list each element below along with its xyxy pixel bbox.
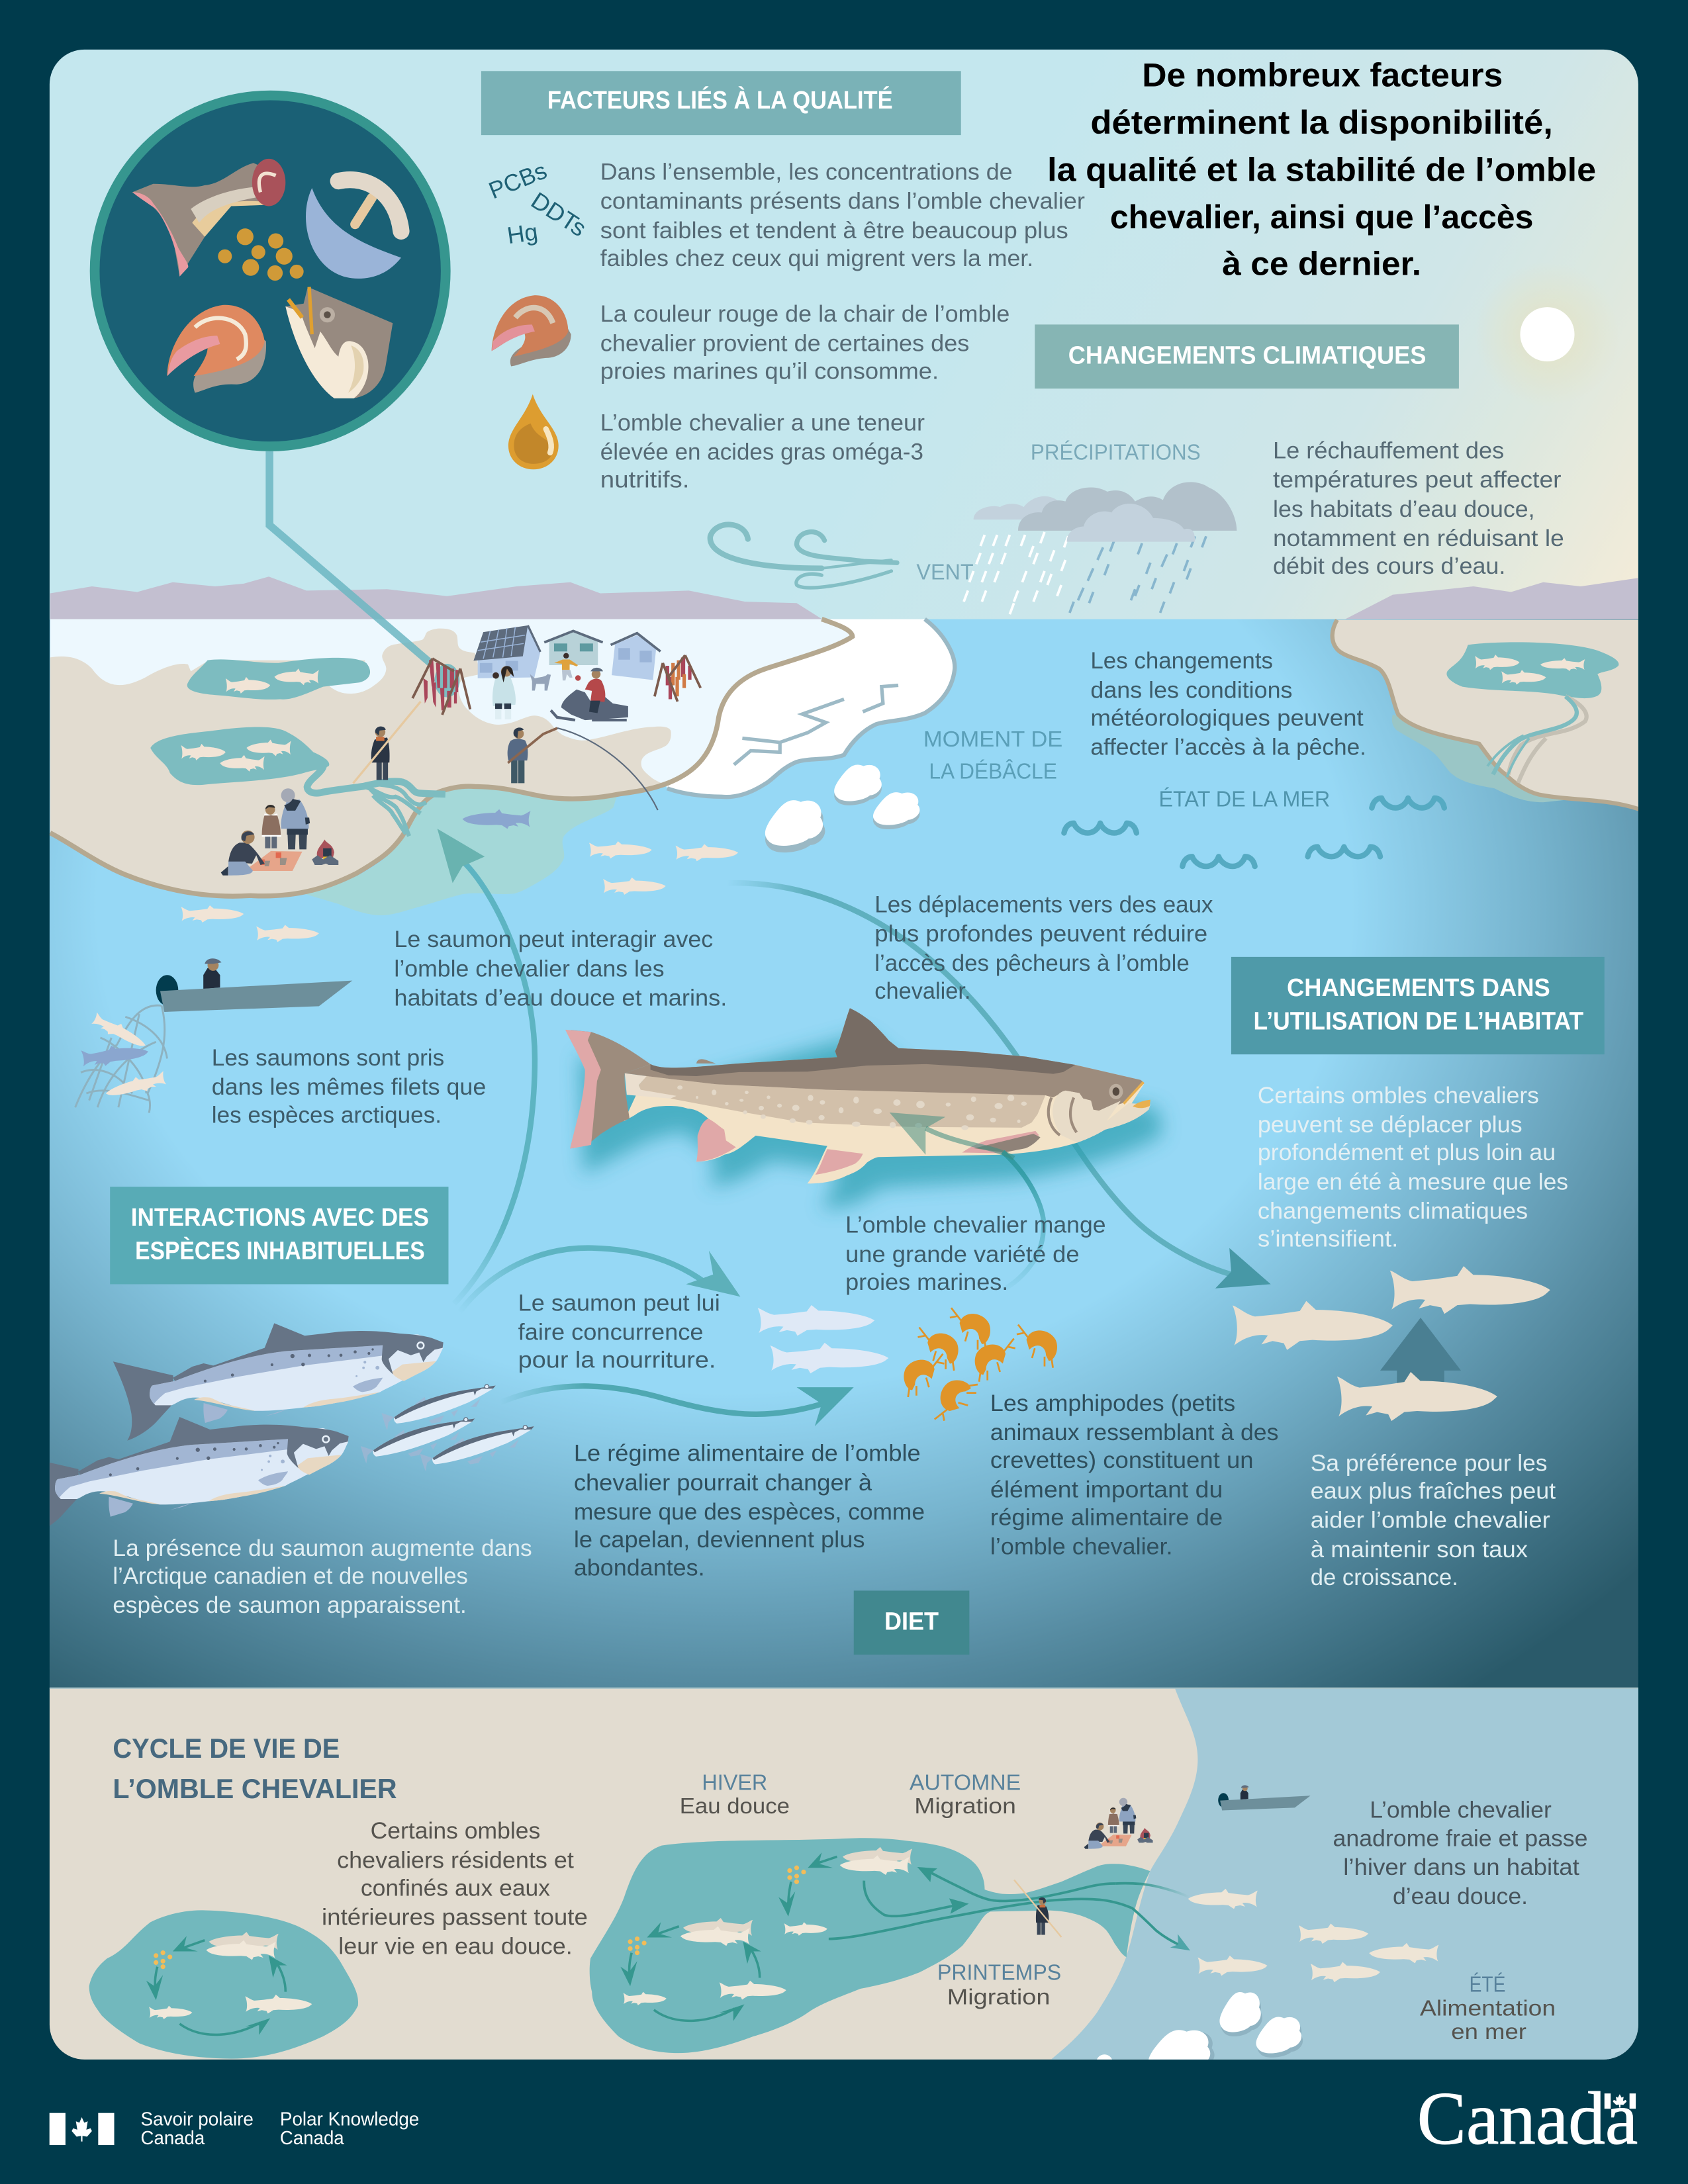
small boat [1218, 1785, 1311, 1810]
silhouette [624, 1008, 1150, 1183]
sea fish and boat [75, 841, 738, 1113]
text: weather access: affecter l’accès à la pêche. [1090, 735, 1366, 760]
text: deeper in summer: peuvent se déplacer plus [1258, 1112, 1523, 1138]
arrow: char to deeper water [727, 883, 1271, 1289]
text: deeper in summer: changements climatiques [1258, 1199, 1528, 1224]
title: la qualité et la stabilité de l’omble [1047, 151, 1596, 189]
heading: cycle de vie: L’OMBLE CHEVALIER [113, 1773, 397, 1804]
arrow: capelin diet [500, 1386, 854, 1426]
text: cooler water [1311, 1450, 1556, 1590]
english wordmark: Polar Knowledge [280, 2109, 419, 2130]
text: warming [1273, 437, 1564, 579]
text: deeper water access: chevalier. [874, 978, 970, 1004]
text: contaminants: Dans l’ensemble, les concentrations de [600, 159, 1013, 185]
quality circle [95, 95, 445, 447]
cream fish [1233, 1266, 1550, 1421]
large arctic char [565, 1008, 1162, 1208]
text: red flesh [600, 301, 1009, 384]
migration arrows [829, 1873, 1189, 1944]
canada wordmark: Canada [1417, 2077, 1638, 2160]
text: weather access: dans les conditions [1090, 677, 1292, 703]
cool water preference diagram [1233, 1266, 1550, 1421]
text: deeper water access [874, 892, 1213, 1004]
text: warming: débit des cours d’eau. [1273, 553, 1505, 579]
icon: rain clouds [964, 482, 1237, 614]
labels: printemps: PRINTEMPS [937, 1961, 1061, 1985]
heading: facteurs liés à la qualité: FACTEURS LIÉS À LA QUALITÉ [547, 85, 893, 114]
child with ball [554, 653, 581, 681]
text: amphipods: régime alimentaire de [990, 1505, 1223, 1531]
text: red flesh: chevalier provient de certaines des [600, 330, 969, 356]
text: red flesh: La couleur rouge de la chair de l’omble [600, 301, 1009, 327]
canadian flag [50, 2113, 115, 2145]
text: cooler water: eaux plus fraîches peut [1311, 1479, 1556, 1504]
juvenile fish [245, 1995, 312, 2013]
text: deeper in summer: Certains ombles chevaliers [1258, 1083, 1539, 1109]
drying rack right [655, 655, 700, 702]
capelin group [361, 1385, 534, 1471]
text: warming: températures peut affecter [1273, 467, 1562, 493]
text: omega 3: nutritifs. [600, 467, 689, 493]
text: deeper in summer: large en été à mesure que les [1258, 1169, 1568, 1195]
sky section [49, 49, 1639, 620]
right land [1333, 620, 1644, 811]
text: salmon interaction [394, 927, 727, 1011]
cream tail base [625, 1073, 677, 1099]
snowmobile rider [551, 668, 628, 720]
cycle arrows [155, 1940, 285, 2034]
text: salmon presence [113, 1535, 532, 1618]
text: anadromous char: d’eau douce. [1393, 1884, 1528, 1909]
icon: red flesh [492, 295, 571, 367]
cloud front [1067, 504, 1195, 542]
resident lake cycle [89, 1910, 358, 2059]
shadow [579, 1034, 1162, 1208]
heading: cycle de vie: CYCLE DE VIE DE [113, 1733, 340, 1764]
ice cracks [734, 685, 898, 764]
labels: été [1420, 1973, 1556, 2044]
text: anadromous char [1333, 1797, 1588, 1909]
leader line from circle to village [269, 451, 430, 663]
title: déterminent la disponibilité, [1090, 103, 1553, 141]
text: nets: les espèces arctiques. [212, 1102, 442, 1128]
gill slits [1049, 1097, 1076, 1135]
title: chevalier, ainsi que l’accès [1110, 198, 1533, 236]
dorsal stripe and fin [651, 1008, 1075, 1076]
cycle group [146, 1932, 312, 2035]
rain [964, 532, 1206, 614]
text: resident char: confinés aux eaux [361, 1875, 551, 1901]
text: deeper water access: Les déplacements vers des eaux [874, 892, 1213, 918]
dog [530, 674, 551, 690]
speckled flank [639, 1076, 1045, 1128]
icon: fish steak [167, 305, 266, 392]
icon: fish tail cut [132, 159, 285, 277]
text: varied diet: proies marines. [845, 1269, 1008, 1295]
text: omega 3 [600, 410, 925, 493]
mouth [1123, 1082, 1143, 1104]
icon: roe eggs [218, 228, 304, 281]
floating ice [765, 764, 919, 852]
heading: interactions avec des espèces inhabituelles [110, 1187, 448, 1284]
text: warming: Le réchauffement des [1273, 437, 1504, 463]
text: contaminants [600, 159, 1085, 271]
heading: changements dans l'utilisation de l'habitat: CHANGEMENTS DANS [1287, 974, 1550, 1002]
coastline [50, 619, 853, 896]
text: resident char [322, 1818, 588, 1960]
ocean feeding fish [1188, 1889, 1438, 1982]
icon: ulu knife [306, 180, 401, 279]
migratory lake and channel [590, 1838, 1150, 2053]
text: amphipods: crevettes) constituent un [990, 1447, 1254, 1473]
text: diet change: mesure que des espèces, comme [574, 1499, 925, 1525]
text: resident char: intérieures passent toute [322, 1905, 588, 1931]
text: salmon presence: l’Arctique canadien et de nouvelles [113, 1563, 468, 1589]
text: amphipods: animaux ressemblant à des [990, 1420, 1278, 1445]
back [625, 1048, 1145, 1111]
icon: sun [1520, 307, 1575, 361]
text: deeper in summer: s’intensifient. [1258, 1226, 1398, 1252]
sea ice edge [667, 619, 955, 797]
icon: oil drop [508, 394, 559, 469]
sea ice [655, 619, 955, 797]
icon: wind [710, 525, 897, 588]
text: resident char: leur vie en eau douce. [338, 1934, 573, 1960]
text: varied diet: L’omble chevalier mange [845, 1212, 1106, 1238]
arctic char swimming [181, 841, 738, 942]
text: competition [518, 1290, 720, 1373]
small family [1084, 1798, 1153, 1849]
label: état de la mer: ÉTAT DE LA MER [1158, 788, 1330, 812]
text: cooler water: à maintenir son taux [1311, 1537, 1528, 1563]
spots [677, 1085, 1027, 1130]
text: varied diet: une grande variété de [845, 1242, 1080, 1267]
icon: contaminants: PCBs [485, 157, 551, 204]
lake one [187, 658, 370, 700]
house with solar panels [473, 625, 540, 678]
fresh ice [50, 619, 853, 836]
text: amphipods: élément important du [990, 1477, 1223, 1502]
text: omega 3: L’omble chevalier a une teneur [600, 410, 925, 435]
lake two and river [150, 727, 445, 836]
labels: printemps: Migration [947, 1985, 1050, 2010]
french wordmark [140, 2109, 254, 2149]
heading: cycle de vie [113, 1733, 397, 1804]
text: deeper in summer [1258, 1083, 1568, 1252]
fish in net [81, 1011, 167, 1101]
label: précipitations: PRÉCIPITATIONS [1031, 441, 1201, 465]
fisher with rod [508, 727, 658, 810]
text: deeper water access: l’accès des pêcheurs à l’omble [874, 950, 1190, 976]
heading: diet [854, 1590, 969, 1655]
text: weather access: Les changements [1090, 648, 1273, 674]
pond behind drying rack [434, 664, 459, 698]
text: deeper water access: plus profondes peuvent réduire [874, 921, 1207, 947]
label: moment de la débâcle [923, 727, 1062, 784]
northern shore map [50, 451, 955, 915]
lower life cycle background [49, 1688, 1639, 2062]
house three [611, 633, 661, 680]
eye [1109, 1084, 1123, 1099]
net [75, 1005, 167, 1113]
english wordmark: Canada [280, 2128, 344, 2149]
head cheek [1053, 1091, 1150, 1143]
heading: interactions avec des espèces inhabituelles: INTERACTIONS AVEC DES [131, 1204, 429, 1232]
cloud left [974, 496, 1072, 520]
text: diet change: abondantes. [574, 1555, 705, 1580]
heading: changements climatiques [1035, 324, 1459, 388]
woman with child [492, 666, 516, 719]
heading: diet: DIET [884, 1608, 939, 1635]
heading: changements dans l'utilisation de l'habitat [1231, 957, 1605, 1054]
small spear fisher [1014, 1880, 1061, 1937]
heading: changements dans l'utilisation de l'habitat: L’UTILISATION DE L’HABITAT [1254, 1007, 1583, 1035]
labels: été: en mer [1451, 2020, 1526, 2044]
text: contaminants: sont faibles et tendent à être beaucoup plus [600, 218, 1068, 244]
estuary [301, 786, 617, 915]
labels: été: ÉTÉ [1470, 1973, 1505, 1997]
labels: hiver: Eau douce [680, 1794, 790, 1819]
text: amphipods: Les amphipodes (petits [990, 1390, 1235, 1416]
salmon pair [19, 1323, 444, 1534]
government signature [50, 2109, 419, 2149]
labels: automne: Migration [914, 1794, 1016, 1819]
fisher with spear [353, 702, 420, 783]
icon: contaminants: DDTs [526, 187, 591, 242]
icon: contaminants [485, 157, 591, 249]
boat with fisher [156, 958, 352, 1012]
labels: hiver: HIVER [702, 1770, 767, 1795]
adipose fin [696, 1059, 716, 1064]
bottom ice floes [1096, 1992, 1303, 2075]
text: omega 3: élevée en acides gras oméga-3 [600, 439, 923, 465]
label: moment de la débâcle: MOMENT DE [923, 727, 1062, 752]
text: amphipods [990, 1390, 1278, 1560]
text: nets: dans les mêmes filets que [212, 1074, 486, 1100]
icon: contaminants: Hg [505, 218, 539, 249]
labels: été: Alimentation [1420, 1996, 1556, 2021]
right shore [1333, 620, 1644, 811]
tail [571, 1030, 651, 1148]
text: contaminants: faibles chez ceux qui migrent vers la mer. [600, 246, 1033, 271]
title: De nombreux facteurs [1142, 56, 1503, 93]
labels: automne: AUTOMNE [910, 1770, 1021, 1795]
text: salmon interaction: habitats d’eau douce et marins. [394, 985, 727, 1011]
heading: facteurs liés à la qualité [481, 71, 961, 135]
text: diet change: chevalier pourrait changer à [574, 1470, 872, 1496]
text: resident char: Certains ombles [371, 1818, 540, 1844]
text: weather access [1090, 648, 1366, 760]
arrow: char eats prey [890, 1113, 1044, 1289]
land [50, 629, 671, 896]
text: salmon interaction: Le saumon peut interagir avec [394, 927, 713, 952]
blue salmon at the estuary [463, 809, 531, 829]
arrow: competition [459, 1248, 740, 1312]
fry [149, 2006, 192, 2019]
heading: interactions avec des espèces inhabituelles: ESPÈCES INHABITUELLES [135, 1236, 425, 1265]
text: diet change: le capelan, deviennent plus [574, 1527, 865, 1553]
text: deeper in summer: profondément et plus loin au [1258, 1140, 1556, 1165]
lower fins [696, 1118, 863, 1175]
text: diet change: Le régime alimentaire de l’omble [574, 1441, 921, 1467]
heading: changements climatiques: CHANGEMENTS CLIMATIQUES [1068, 341, 1426, 369]
icon: fish head [285, 287, 393, 398]
text: nets: Les saumons sont pris [212, 1045, 444, 1071]
up arrow [1380, 1318, 1461, 1387]
french wordmark: Canada [140, 2128, 205, 2149]
upper fish and eggs [778, 1847, 912, 1936]
labels: automne [910, 1770, 1021, 1819]
house two [544, 631, 603, 665]
english wordmark [280, 2109, 419, 2149]
tail pink edge [565, 1030, 601, 1149]
cloud dark [1018, 482, 1237, 531]
prey fish [758, 1305, 888, 1373]
pectoral fin [962, 1131, 1039, 1154]
text: salmon presence: La présence du saumon augmente dans [113, 1535, 532, 1561]
eggs [154, 1950, 172, 1969]
text: anadromous char: anadrome fraie et passe [1333, 1826, 1588, 1852]
text: diet change [574, 1441, 925, 1580]
arrow: salmon to estuary [438, 829, 535, 1304]
text: warming: les habitats d’eau douce, [1273, 496, 1535, 522]
adult fish pair [206, 1932, 279, 1960]
migratory cycle [620, 1847, 1190, 2021]
text: salmon interaction: l’omble chevalier dans les [394, 956, 665, 981]
labels: printemps [937, 1961, 1061, 2010]
right coastline [1333, 620, 1644, 811]
text: cooler water: de croissance. [1311, 1565, 1458, 1590]
text: resident char: chevaliers résidents et [337, 1847, 574, 1873]
icon: waves [1064, 798, 1444, 866]
label: vent: VENT [916, 561, 974, 585]
text: red flesh: proies marines qu’il consomme. [600, 358, 939, 384]
text: anadromous char: l’hiver dans un habitat [1343, 1854, 1579, 1880]
family with fish on mat [221, 788, 338, 876]
text: competition: Le saumon peut lui [518, 1290, 720, 1316]
text: competition: faire concurrence [518, 1320, 703, 1345]
right estuary [1392, 715, 1570, 802]
title [1047, 56, 1596, 283]
text: salmon presence: espèces de saumon apparaissent. [113, 1592, 467, 1618]
sea section [49, 619, 1639, 1689]
text: amphipods: l’omble chevalier. [990, 1534, 1173, 1560]
drying rack left [412, 659, 470, 715]
title: à ce dernier. [1222, 245, 1421, 283]
text: cooler water: Sa préférence pour les [1311, 1450, 1547, 1476]
text: weather access: météorologiques peuvent [1090, 705, 1364, 731]
right lake and river [1446, 642, 1618, 783]
text: warming: notamment en réduisant le [1273, 525, 1564, 551]
text: cooler water: aider l’omble chevalier [1311, 1508, 1550, 1533]
text: varied diet [845, 1212, 1106, 1295]
french wordmark: Savoir polaire [140, 2109, 254, 2130]
labels: hiver [680, 1770, 790, 1819]
text: competition: pour la nourriture. [518, 1347, 716, 1373]
text: anadromous char: L’omble chevalier [1370, 1797, 1552, 1823]
text: contaminants: contaminants présents dans l’omble chevalier [600, 189, 1085, 214]
label: moment de la débâcle: LA DÉBÂCLE [929, 759, 1057, 784]
amphipods [904, 1308, 1057, 1421]
text: nets [212, 1045, 486, 1128]
